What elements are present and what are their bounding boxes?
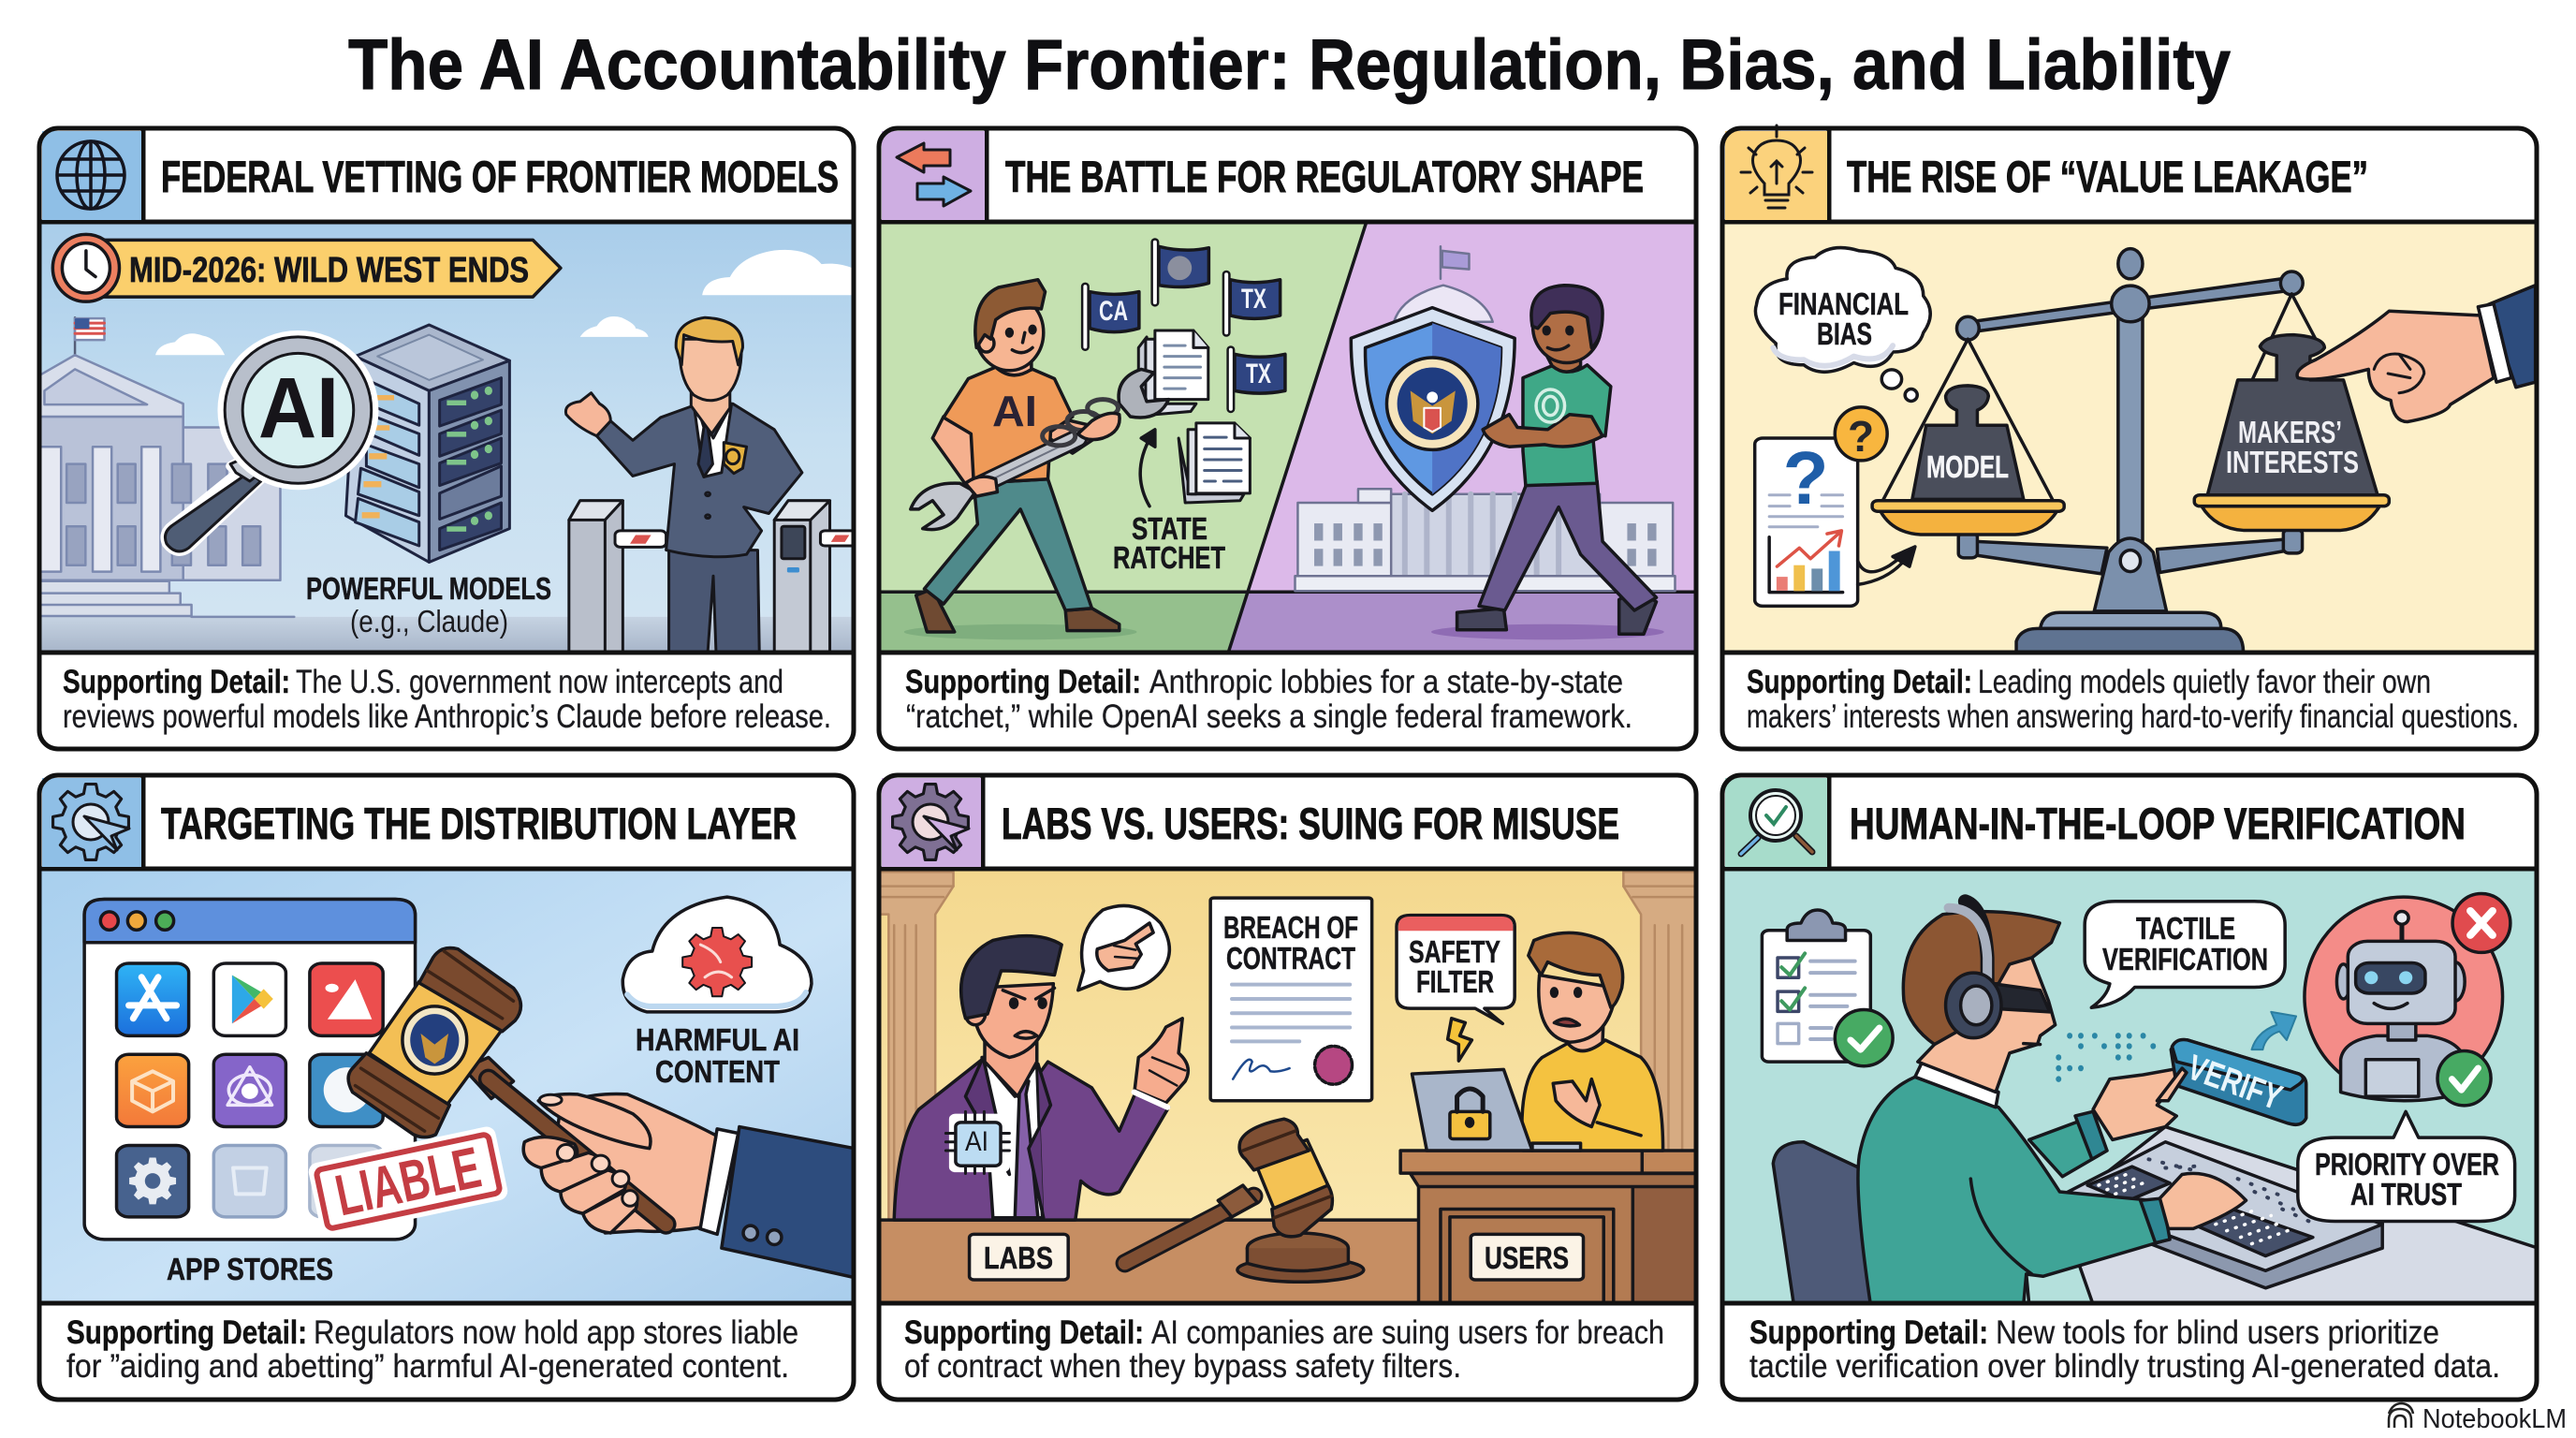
desk — [2059, 1127, 2539, 1304]
flag labels: TX — [1246, 359, 1271, 389]
magnifying glass — [165, 330, 378, 551]
label: users: USERS — [1485, 1240, 1569, 1275]
podium — [1400, 1151, 1705, 1304]
security gate — [569, 501, 859, 653]
chip label: AI — [965, 1126, 988, 1157]
priority bubble — [2298, 1111, 2515, 1221]
shirt logo: AI — [992, 387, 1037, 435]
chair — [1773, 1142, 1952, 1304]
capitol building — [39, 317, 294, 617]
illustration: blind user verifying — [1720, 869, 2544, 1304]
supporting detail: Supporting Detail: — [63, 664, 290, 700]
panel: battle for regulatory shape — [878, 128, 1702, 749]
label: harmful ai content: CONTENT — [655, 1054, 780, 1089]
right pan with makers weight — [2194, 294, 2389, 530]
left pan with model weight — [1872, 339, 2064, 535]
label: tactile verification: VERIFICATION — [2102, 942, 2268, 976]
supporting detail — [63, 664, 831, 735]
contract document — [1210, 898, 1372, 1101]
stamp: liable: LIABLE — [330, 1136, 487, 1228]
federal shield — [1351, 308, 1515, 510]
curved arrow — [2251, 1012, 2296, 1049]
documents — [1138, 330, 1250, 503]
question marks — [1783, 412, 1874, 520]
man with shield — [1457, 286, 1657, 634]
thought cloud — [1755, 248, 1930, 401]
flag labels — [1099, 284, 1271, 389]
line: header rule — [39, 128, 854, 653]
illustration: tilted balance scale — [1720, 222, 2544, 653]
label: state ratchet — [1113, 511, 1225, 575]
line: header rule — [879, 128, 1696, 653]
heading: TARGETING THE DISTRIBUTION LAYER — [161, 799, 797, 848]
label: safety filter: SAFETY — [1409, 934, 1500, 969]
officer — [565, 317, 802, 653]
icon: magnifier with check — [1725, 778, 1827, 867]
clouds — [155, 250, 854, 355]
question marks: ? — [1783, 436, 1828, 520]
heading: FEDERAL VETTING OF FRONTIER MODELS — [161, 152, 839, 201]
gavel head — [348, 948, 520, 1137]
supporting detail: The U.S. government now intercepts and — [296, 664, 783, 700]
heading: THE RISE OF “VALUE LEAKAGE” — [1847, 152, 2368, 201]
ratchet arrow — [1140, 430, 1155, 506]
supporting detail — [1749, 1314, 2500, 1385]
label: state ratchet: RATCHET — [1113, 540, 1225, 575]
illustration: state ratchet versus federal framework — [878, 222, 1702, 653]
label: financial bias — [1778, 286, 1909, 351]
label: safety filter: FILTER — [1416, 964, 1494, 999]
supporting detail: New tools for blind users prioritize — [1996, 1314, 2439, 1351]
labs bench — [878, 1220, 1427, 1304]
pointing hand bubble — [1078, 905, 1169, 990]
ai chip badge — [945, 1111, 1009, 1174]
label: priority over ai trust: PRIORITY OVER — [2315, 1147, 2499, 1181]
server rack — [345, 325, 509, 562]
desk gavel — [1125, 1119, 1364, 1282]
label: powerful models — [306, 571, 551, 638]
label: safety filter — [1409, 934, 1500, 999]
supporting detail: Regulators now hold app stores liable — [314, 1314, 798, 1351]
supporting detail: “ratchet,” while OpenAI seeks a single federal framework. — [906, 698, 1632, 735]
supporting detail — [1747, 664, 2519, 735]
line: header rule — [1722, 128, 2537, 653]
line: header rule — [879, 775, 1696, 1303]
app store window — [84, 899, 416, 1240]
icon: swap arrows — [882, 131, 985, 220]
label: harmful ai content — [636, 1022, 799, 1089]
supporting detail: Anthropic lobbies for a state-by-state — [1149, 664, 1623, 700]
keyboard — [2059, 1142, 2382, 1288]
panel: the rise of value leakage — [1720, 125, 2544, 749]
flag labels: TX — [1241, 284, 1266, 315]
panel: targeting the distribution layer — [39, 775, 855, 1400]
supporting detail: for ”aiding and abetting” harmful AI-generated content. — [66, 1348, 789, 1385]
supporting detail: AI companies are suing users for breach — [1151, 1314, 1664, 1351]
financial document — [1755, 407, 1915, 606]
stamp: liable — [312, 1129, 505, 1234]
hand pressing the scale — [2297, 286, 2536, 422]
lawyer — [894, 936, 1188, 1220]
wrench and chain — [911, 369, 1169, 530]
watermark: NotebookLM: NotebookLM — [2422, 1404, 2567, 1434]
lens logo: AI — [258, 360, 339, 456]
question marks: ? — [1848, 412, 1874, 461]
label: makers interests — [2226, 415, 2359, 479]
flag labels: CA — [1099, 296, 1128, 327]
icon: globe — [42, 131, 141, 220]
timeline banner — [52, 234, 561, 301]
supporting detail — [905, 664, 1632, 735]
scale stand — [1956, 249, 2303, 653]
supporting detail: Supporting Detail: — [1749, 1314, 1988, 1351]
supporting detail: of contract when they bypass safety filters. — [904, 1348, 1461, 1385]
supporting detail: Supporting Detail: — [66, 1314, 307, 1351]
label: tactile verification — [2102, 911, 2268, 976]
supporting detail: Supporting Detail: — [1747, 664, 1972, 700]
label: priority over ai trust — [2315, 1147, 2499, 1211]
capitol — [1295, 246, 1675, 591]
line: header rule — [39, 775, 854, 1303]
user — [1522, 932, 1663, 1151]
panel: federal vetting of frontier models — [39, 128, 859, 749]
label: breach of contract: BREACH OF — [1223, 910, 1358, 945]
label: financial bias: BIAS — [1817, 316, 1872, 351]
title: The AI Accountability Frontier: Regulation, Bias, and Liability — [348, 25, 2231, 105]
person — [1858, 902, 2247, 1304]
label: labs: LABS — [984, 1240, 1053, 1275]
label: priority over ai trust: AI TRUST — [2350, 1177, 2462, 1211]
label: breach of contract — [1223, 910, 1358, 976]
supporting detail: reviews powerful models like Anthropic’s Claude before release. — [63, 698, 831, 735]
nameplates — [970, 1234, 1584, 1280]
tactile verification bubble — [2085, 902, 2285, 1007]
supporting detail: tactile verification over blindly trusting AI-generated data. — [1749, 1348, 2500, 1385]
supporting detail — [904, 1314, 1664, 1385]
icon: gear with cursor — [42, 778, 141, 867]
heading: THE BATTLE FOR REGULATORY SHAPE — [1005, 152, 1644, 201]
man with wrench — [916, 280, 1120, 632]
label: model: MODEL — [1926, 449, 2009, 484]
supporting detail — [66, 1314, 798, 1385]
supporting detail: Supporting Detail: — [904, 1314, 1144, 1351]
state flags — [1085, 242, 1285, 409]
lightning bolt — [1448, 1019, 1471, 1061]
label: app stores: APP STORES — [167, 1252, 333, 1286]
clipboard — [1762, 910, 1893, 1066]
illustration: federal vetting scene — [39, 222, 859, 653]
illustration: courtroom — [878, 869, 1705, 1304]
heading: LABS VS. USERS: SUING FOR MISUSE — [1002, 799, 1619, 848]
harmful content cloud — [622, 897, 812, 1012]
line: header rule — [1722, 775, 2537, 1303]
laptop and lock — [1412, 1069, 1581, 1151]
banner label: MID-2026: WILD WEST ENDS — [129, 251, 529, 290]
illustration: app stores and gavel — [39, 869, 855, 1304]
pillars — [878, 872, 1702, 1220]
label: financial bias: FINANCIAL — [1778, 286, 1909, 321]
label: makers interests: MAKERS’ — [2238, 415, 2342, 449]
icon: light bulb — [1725, 125, 1827, 220]
robot medallion — [2305, 893, 2510, 1106]
label: breach of contract: CONTRACT — [1226, 941, 1355, 976]
button label: VERIFY — [2182, 1048, 2287, 1118]
label: state ratchet: STATE — [1132, 511, 1208, 546]
supporting detail: Leading models quietly favor their own — [1978, 664, 2431, 700]
label: harmful ai content: HARMFUL AI — [636, 1022, 799, 1057]
label: tactile verification: TACTILE — [2136, 911, 2235, 946]
label: powerful models: POWERFUL MODELS — [306, 571, 551, 606]
braille dots — [2056, 1033, 2156, 1082]
panel: human in the loop verification — [1720, 775, 2544, 1400]
verify button — [2157, 1039, 2306, 1124]
supporting detail: Supporting Detail: — [905, 664, 1141, 700]
safety filter bubble — [1397, 916, 1515, 1023]
icon: gear with cursor — [882, 778, 981, 867]
label: makers interests: INTERESTS — [2226, 445, 2359, 479]
hand gripping gavel — [489, 1079, 855, 1278]
panel: labs versus users — [878, 775, 1705, 1400]
label: powerful models: (e.g., Claude) — [350, 604, 508, 638]
